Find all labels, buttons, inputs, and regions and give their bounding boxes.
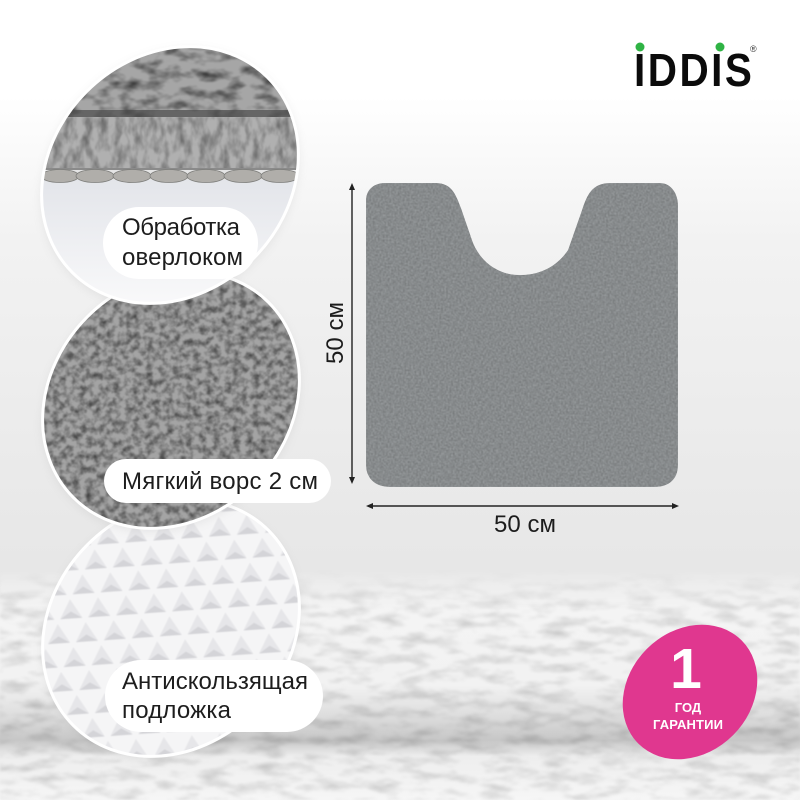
badge: 1 year warranty: 1 xyxy=(670,637,702,701)
label pill: pile height xyxy=(104,459,331,503)
logo: IDDIS: ® xyxy=(750,44,757,54)
panel: anti-slip backing xyxy=(41,505,323,759)
arrow: horizontal dimension xyxy=(366,503,679,509)
arrow: vertical dimension xyxy=(349,183,355,484)
texture: pile xyxy=(44,280,298,527)
label pill: overlock: оверлоком xyxy=(122,244,243,271)
vertical label: 50 cm: 50 см xyxy=(322,302,349,364)
label pill: overlock: Обработка xyxy=(122,214,241,241)
label pill: anti-slip: Антискользящая xyxy=(122,668,308,695)
label pill: pile height: Мягкий ворс 2 см xyxy=(122,468,318,495)
label pill: anti-slip: подложка xyxy=(122,697,232,724)
panel: soft pile xyxy=(41,278,331,532)
horizontal label: 50 cm: 50 см xyxy=(494,511,556,538)
background: fluffy white rug texture xyxy=(0,570,800,800)
photo: edge close-up xyxy=(44,48,297,302)
logo dot: first i xyxy=(636,42,644,52)
badge: 1 year warranty: ГАРАНТИИ xyxy=(653,717,723,732)
panel: mat with dimensions xyxy=(322,183,679,538)
panel: overlock edging xyxy=(40,48,297,305)
logo: IDDIS: IDDIS xyxy=(634,46,752,97)
label pill: overlock xyxy=(103,207,258,279)
label pill: anti-slip xyxy=(105,660,323,732)
mat product shape xyxy=(366,183,678,487)
badge: 1 year warranty xyxy=(595,597,785,787)
texture: triangle pattern xyxy=(44,508,298,755)
badge: 1 year warranty: ГОД xyxy=(675,700,702,715)
